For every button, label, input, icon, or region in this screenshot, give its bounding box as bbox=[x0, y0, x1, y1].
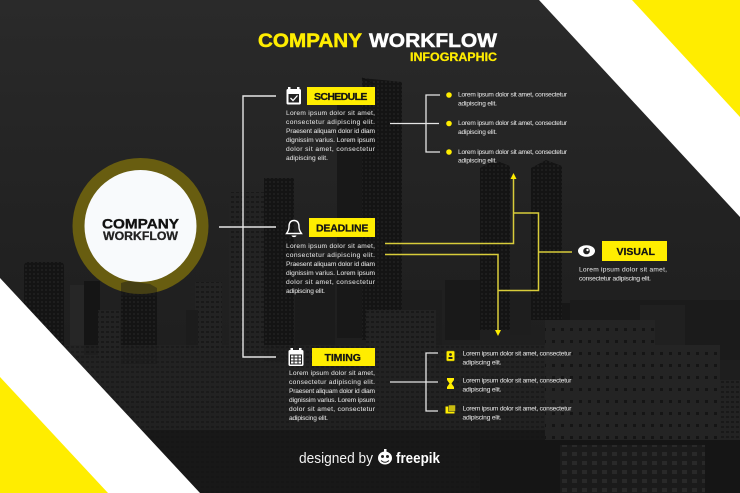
panel: schedule bbox=[286, 87, 377, 162]
text: visual body: Lorem ipsum dolor sit amet, bbox=[579, 266, 667, 274]
title bbox=[258, 30, 498, 64]
text: timing body: Lorem ipsum dolor sit amet, bbox=[289, 370, 375, 377]
item: contact book bbox=[446, 350, 572, 366]
connector: main white bracket bbox=[219, 96, 276, 357]
corner band: bottom left yellow bbox=[0, 377, 108, 493]
item: photo cards: Lorem ipsum dolor sit amet, consectetur bbox=[462, 406, 572, 412]
text: deadline body: consectetur adipiscing elit. bbox=[286, 252, 375, 259]
text: schedule body: dignissim varius. Lorem ipsum bbox=[286, 137, 376, 144]
item: contact book: adipiscing elit. bbox=[462, 360, 502, 366]
central circle: WORKFLOW bbox=[103, 229, 179, 243]
yellow arrow down bbox=[385, 254, 501, 336]
text: deadline body: Lorem ipsum dolor sit amet, bbox=[286, 243, 375, 250]
text: visual body: consectetur adipiscing elit. bbox=[579, 276, 651, 282]
attribution bbox=[299, 449, 441, 467]
text: timing body: Praesent aliquam dolor id diam bbox=[289, 388, 376, 395]
label: schedule: SCHEDULE bbox=[314, 91, 368, 103]
yellow arrow up bbox=[385, 173, 516, 244]
central circle bbox=[72, 158, 208, 296]
panel: visual bbox=[578, 241, 669, 282]
bullet two: Lorem ipsum dolor sit amet, consectetur bbox=[458, 120, 568, 127]
text: timing body: consectetur adipiscing elit. bbox=[289, 379, 375, 386]
title: INFOGRAPHIC bbox=[410, 52, 497, 64]
text: schedule body: dolor sit amet, consectetur bbox=[286, 146, 376, 153]
attribution: freepik bbox=[396, 450, 441, 467]
bullet three bbox=[446, 149, 568, 164]
bullet one: Lorem ipsum dolor sit amet, consectetur bbox=[458, 92, 568, 98]
bullet one bbox=[446, 92, 568, 108]
bullet one: adipiscing elit. bbox=[458, 100, 497, 108]
corner band: bottom left white bbox=[0, 278, 200, 493]
list: schedule points bbox=[446, 92, 568, 164]
bullet two bbox=[446, 120, 568, 136]
icon: eye bbox=[578, 245, 595, 257]
icon: calendar check bbox=[286, 87, 301, 104]
icon: calendar grid bbox=[288, 348, 304, 366]
label: timing: TIMING bbox=[324, 352, 362, 364]
text: schedule body: consectetur adipiscing elit. bbox=[286, 119, 375, 126]
text: deadline body: Praesent aliquam dolor id diam bbox=[286, 261, 376, 268]
label: visual: VISUAL bbox=[616, 246, 656, 258]
panel: timing bbox=[288, 348, 377, 422]
panel: deadline bbox=[286, 218, 377, 295]
text: deadline body: dignissim varius. Lorem ipsum bbox=[286, 270, 376, 277]
text: deadline body: dolor sit amet, consectetur bbox=[286, 279, 376, 286]
list: timing points bbox=[446, 350, 572, 422]
icon: freepik mascot bbox=[378, 449, 392, 464]
text: timing body: adipiscing elit. bbox=[289, 415, 328, 422]
bullet three: Lorem ipsum dolor sit amet, consectetur bbox=[458, 149, 568, 156]
bullet three: adipiscing elit. bbox=[458, 158, 497, 164]
item: hourglass bbox=[447, 378, 572, 394]
text: schedule body: adipiscing elit. bbox=[286, 155, 328, 162]
item: hourglass: adipiscing elit. bbox=[462, 386, 502, 394]
text: deadline body: adipiscing elit. bbox=[286, 288, 325, 295]
text: timing body: dolor sit amet, consectetur bbox=[289, 406, 376, 413]
corner band: top right yellow bbox=[632, 0, 740, 117]
connector: timing bracket bbox=[390, 353, 438, 411]
connector: schedule bracket bbox=[390, 95, 440, 152]
text: timing body: dignissim varius. Lorem ipsum bbox=[289, 397, 376, 404]
item: contact book: Lorem ipsum dolor sit amet, consectetur bbox=[462, 350, 572, 358]
item: hourglass: Lorem ipsum dolor sit amet, consectetur bbox=[462, 378, 572, 384]
text: schedule body: Lorem ipsum dolor sit amet, bbox=[286, 110, 375, 117]
yellow connector to visual bbox=[498, 213, 572, 290]
item: photo cards bbox=[446, 405, 572, 422]
title: COMPANY bbox=[258, 30, 362, 52]
icon: bell bbox=[286, 220, 302, 237]
bullet two: adipiscing elit. bbox=[458, 129, 497, 136]
central circle: COMPANY bbox=[102, 216, 180, 232]
text: schedule body: Praesent aliquam dolor id diam bbox=[286, 128, 376, 135]
corner band: top right white bbox=[539, 0, 740, 217]
label: deadline: DEADLINE bbox=[316, 222, 369, 234]
title: WORKFLOW bbox=[369, 30, 498, 52]
item: photo cards: adipiscing elit. bbox=[462, 414, 502, 422]
attribution: designed by bbox=[299, 451, 374, 467]
